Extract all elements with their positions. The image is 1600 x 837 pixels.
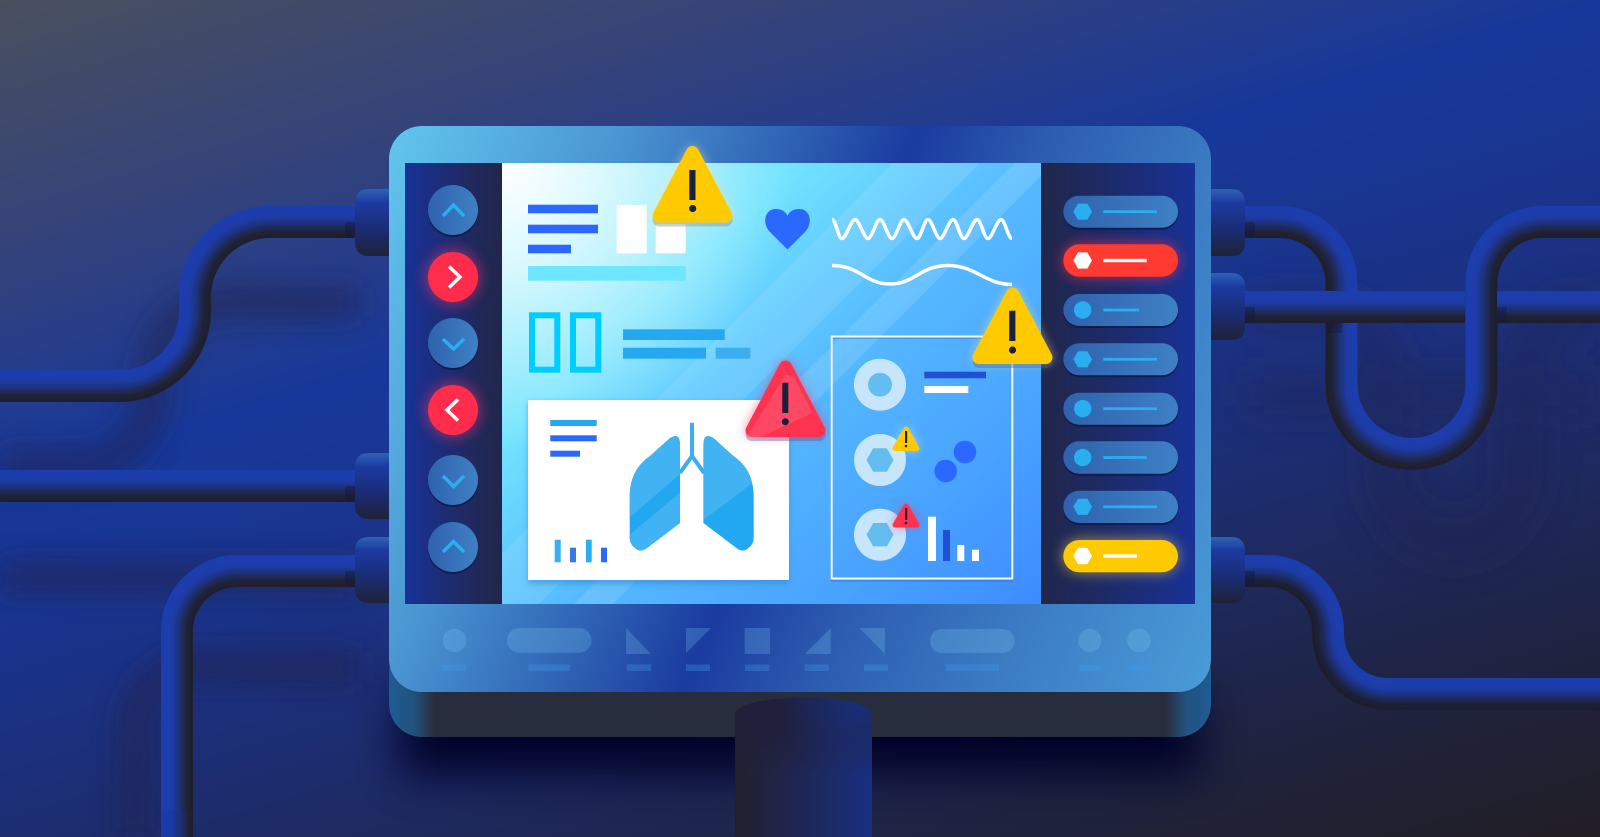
white blocks	[617, 205, 686, 253]
icon: heart	[765, 209, 810, 250]
pipe: middle right crossing, right part	[1470, 291, 1600, 307]
chart: slow waveform	[832, 266, 1012, 284]
button: down	[428, 455, 478, 507]
mini bar chart	[555, 540, 607, 562]
cyan bar	[528, 266, 686, 281]
pipe: upper left	[0, 206, 400, 386]
button: down	[428, 318, 478, 370]
monitor ground shadow	[400, 690, 1200, 775]
dots	[934, 441, 976, 482]
button: up	[428, 185, 478, 237]
status pill 7	[1063, 491, 1178, 525]
control: triangle 1	[626, 628, 651, 654]
monitor stand	[735, 698, 872, 837]
card: lungs	[528, 400, 789, 584]
ring gauge 2	[854, 434, 906, 486]
outlined cyan boxes	[532, 315, 598, 370]
pipe: middle right crossing, left part	[1180, 291, 1490, 307]
panel: right sidebar	[1041, 163, 1195, 604]
control: circle right 2	[1127, 629, 1151, 652]
control: square	[745, 628, 770, 654]
pipe connectors: right	[1205, 189, 1245, 603]
icon: lungs	[630, 422, 754, 551]
button: left red	[426, 383, 480, 437]
panel: left sidebar	[405, 163, 502, 604]
card: right status panel	[832, 336, 1012, 581]
pipe shadows: left	[0, 302, 358, 837]
control: pill right	[930, 629, 1015, 653]
control labels	[442, 664, 1150, 671]
control: pill left	[507, 628, 592, 653]
button: up	[428, 522, 478, 574]
status pill 1	[1063, 196, 1178, 230]
pipe: lower right	[1200, 555, 1600, 694]
connector contact shadows	[345, 222, 1507, 587]
text lines	[550, 420, 597, 457]
pipe: upper right U-bend	[1200, 206, 1600, 454]
status pill 2: red alert	[1063, 244, 1178, 277]
pipe connectors: left	[355, 189, 395, 603]
ring gauge 3	[854, 509, 906, 561]
bar chart	[928, 517, 979, 561]
warning triangle: right yellow	[979, 294, 1046, 362]
control: triangle 2	[686, 628, 711, 653]
ring gauge 1	[854, 359, 906, 411]
pipe: middle left	[0, 470, 400, 486]
status pill 8: yellow alert	[1063, 540, 1178, 572]
chart: fast waveform	[832, 220, 1012, 238]
text lines: top left	[528, 205, 598, 253]
blue bars: middle left	[623, 329, 750, 359]
pipe shadows: right	[1242, 310, 1600, 542]
control: triangle 4	[859, 628, 885, 654]
status pill 3	[1063, 294, 1178, 328]
control: circle left	[443, 629, 466, 652]
control: triangle 3	[805, 628, 831, 654]
panel: main screen	[502, 163, 1041, 604]
control: circle right 1	[1078, 629, 1101, 652]
text lines	[924, 372, 986, 393]
control strip: bottom icons	[443, 628, 1151, 654]
warning triangle: red	[747, 367, 830, 437]
pipe: lower left	[161, 555, 355, 837]
small warning: red	[895, 506, 917, 525]
status pill 6	[1063, 441, 1178, 476]
warning triangle: top yellow	[659, 152, 726, 220]
monitor base	[389, 640, 1211, 737]
small warning: yellow	[895, 429, 917, 448]
monitor frame	[389, 126, 1211, 692]
status pill 4	[1063, 343, 1178, 377]
status pill 5	[1063, 393, 1178, 427]
button: right red	[426, 250, 480, 304]
